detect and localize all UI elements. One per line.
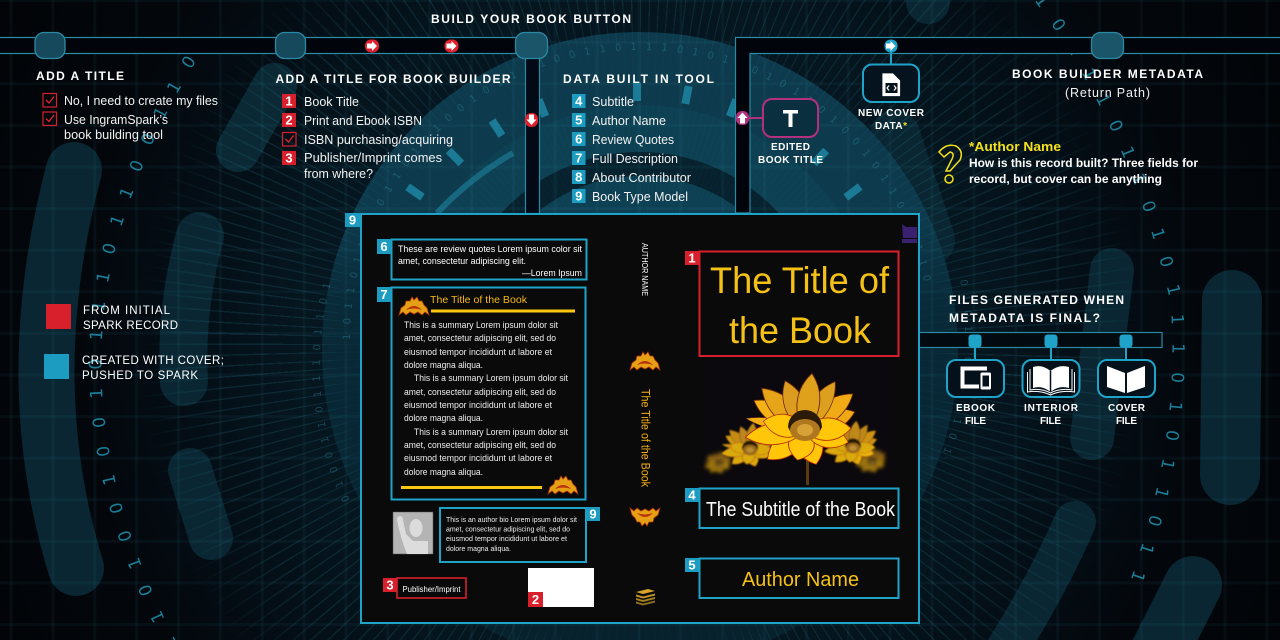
badge 1: 1 (285, 94, 293, 108)
badge 3 (282, 150, 296, 166)
item: Full Description (592, 152, 678, 166)
icon: interior file (1022, 360, 1080, 397)
spine: flower ornament 2 (630, 508, 660, 526)
badge 5 (572, 112, 586, 128)
panel: add a title for book builder (276, 72, 511, 181)
back cover: review quotes: These are review quotes Lorem ipsum color sit (398, 244, 582, 255)
badge 9 (572, 188, 586, 204)
back cover: full description: dolore magna aliqua. (404, 413, 483, 423)
spine: title: The Title of the Book (638, 389, 650, 487)
label: cover file (1108, 403, 1146, 427)
panel: data built in tool (563, 72, 714, 204)
badge 9 corner: 9 (349, 212, 356, 228)
back cover: full description: This is a summary Lorem ipsum dolor sit (414, 373, 568, 383)
item: Book Title (304, 95, 359, 109)
heading: build your book button: BUILD YOUR BOOK BUTTON (431, 12, 631, 26)
background: dial shapes and binary rings: 1011101101011101011011 (1035, 0, 1185, 580)
background: dial shapes and binary rings: 1101001001011101100110 (88, 56, 194, 640)
icon: question mark (939, 145, 961, 183)
label: interior file (1024, 403, 1079, 427)
background: dial shapes and binary rings: 10110110101101010010110100110111010110101101001011010110 (342, 42, 931, 339)
back cover: full description: dolore magna aliqua. (404, 360, 483, 370)
label: cover file: COVER (1108, 403, 1146, 414)
front cover: title: the Book (729, 310, 871, 351)
cover frame (361, 214, 919, 623)
button node 2 (276, 32, 306, 58)
back cover: author bio: 9 (589, 506, 597, 522)
dial disc (322, 32, 958, 640)
panel: files generated (918, 293, 1162, 427)
label: interior file: FILE (1040, 416, 1061, 427)
legend: created with cover (44, 354, 224, 382)
button node 3 (516, 32, 548, 58)
legend: from initial spark record (46, 304, 178, 332)
back cover: author bio: This is an author bio Lorem ipsum dolor sit (446, 515, 578, 524)
front cover: subtitle (685, 488, 898, 528)
front cover: subtitle: The Subtitle of the Book (706, 499, 896, 521)
connectors (968, 334, 1132, 360)
badge 7 (572, 150, 586, 166)
front cover: title (685, 250, 898, 356)
item text: No, I need to create my files (64, 94, 218, 108)
badge 5: 5 (575, 112, 582, 128)
back cover: full description: eiusmod tempor incididunt ut labore et (404, 453, 552, 463)
arrow: down (525, 113, 538, 127)
back cover: author bio (440, 506, 600, 562)
callout: author name (969, 140, 1199, 186)
heading: ADD A TITLE (36, 69, 124, 83)
back cover: barcode box (528, 568, 594, 607)
heading: book builder metadata: BOOK BUILDER METADATA (1012, 67, 1203, 81)
back cover: review quotes (377, 239, 586, 280)
badge 9: 9 (575, 188, 582, 204)
label: new cover data: NEW COVER (858, 108, 925, 119)
spine: flower ornament (630, 352, 660, 370)
callout: author name: *Author Name (969, 140, 1061, 154)
badge 7: 7 (575, 150, 582, 166)
item: Review Quotes (592, 133, 674, 147)
label: edited book title: BOOK TITLE (758, 155, 823, 166)
badge 3: 3 (285, 150, 293, 166)
label: interior file: INTERIOR (1024, 403, 1079, 414)
legend: from initial spark record: SPARK RECORD (83, 320, 178, 332)
arrow: right 2 (444, 40, 458, 52)
arrow: up magenta (736, 111, 749, 125)
button node 4 (1092, 32, 1124, 58)
checkbox 1 (43, 94, 56, 107)
front cover: flower image (702, 360, 893, 485)
label: new cover data (858, 108, 925, 132)
back cover: publisher imprint (383, 578, 466, 598)
callout: author name: record, but cover can be anything (969, 174, 1162, 186)
back cover: full description: eiusmod tempor incididunt ut labore et (404, 400, 552, 410)
arrow: right 1 (365, 40, 379, 52)
back cover: full description: The Title of the Book (430, 294, 528, 306)
top band: build flow (0, 38, 540, 54)
button node 1 (35, 32, 65, 58)
front cover: title: 1 (688, 250, 696, 266)
item continued: from where? (304, 167, 373, 181)
background: radial spokes (166, 0, 1108, 640)
legend: created with cover: PUSHED TO SPARK (82, 370, 198, 382)
back cover: full description (377, 287, 586, 500)
back cover: author bio: eiusmod tempor incididunt ut labore et (446, 534, 568, 543)
item text continued: book building tool (64, 128, 163, 142)
badge 8 (572, 170, 586, 184)
badge 6: 6 (575, 132, 582, 146)
badge 4 (572, 94, 586, 108)
label: ebook file: FILE (965, 416, 986, 427)
legend: created with cover: CREATED WITH COVER; (82, 355, 224, 367)
back cover: full description: This is a summary Lorem ipsum dolor sit (404, 320, 558, 330)
back cover: publisher imprint: Publisher/Imprint (402, 585, 461, 594)
item: Publisher/Imprint comes (304, 151, 442, 165)
item: Book Type Model (592, 190, 688, 204)
icon: new cover data (863, 52, 919, 102)
back cover: author photo (393, 512, 433, 554)
item: Subtitle (592, 95, 634, 109)
spine: author name: AUTHOR NAME (640, 243, 649, 296)
badge 6 (572, 132, 586, 146)
back cover: full description: amet, consectetur adipiscing elit, sed do (404, 333, 556, 343)
heading: ADD A TITLE FOR BOOK BUILDER (276, 72, 511, 86)
icon: cover file (1098, 360, 1155, 397)
legend: from initial spark record: FROM INITIAL (83, 305, 171, 317)
icon: edited book title (749, 99, 818, 137)
icon: ebook file (947, 360, 1004, 397)
badge 2: 2 (285, 112, 293, 128)
back cover: review quotes: 6 (380, 239, 388, 254)
back cover: full description: eiusmod tempor incididunt ut labore et (404, 347, 552, 357)
heading: book builder metadata: (Return Path) (1065, 86, 1150, 100)
checkbox 2 (43, 112, 56, 126)
badge 1 (282, 94, 296, 108)
band (918, 332, 1162, 348)
background: dial shapes and binary rings: 010110101101 (944, 280, 972, 453)
callout: author name: How is this record built? Three fields for (969, 158, 1199, 170)
front cover: author name: Author Name (742, 569, 859, 591)
label: edited book title (758, 142, 823, 166)
arrow: right blue (884, 40, 898, 52)
back cover: barcode box: 2 (532, 592, 539, 607)
badge 9 corner (345, 212, 360, 228)
front cover: subtitle: 4 (688, 488, 696, 502)
back cover: author bio: amet, consectetur adipiscing elit, sed do (446, 524, 570, 534)
back cover: review quotes: —Lorem Ipsum (522, 268, 582, 279)
item: Author Name (592, 114, 666, 128)
top band: return path (736, 38, 1280, 213)
item text: Use IngramSpark’s (64, 113, 168, 127)
badge 4: 4 (575, 94, 583, 108)
heading: book builder metadata (1012, 67, 1203, 100)
checkbox (282, 132, 296, 146)
back cover: full description: dolore magna aliqua. (404, 467, 483, 477)
back cover: full description: amet, consectetur adipiscing elit, sed do (404, 440, 556, 450)
label: edited book title: EDITED (771, 142, 810, 153)
heading: DATA BUILT IN TOOL (563, 72, 714, 86)
item: ISBN purchasing/acquiring (304, 133, 453, 147)
label: ebook file (956, 403, 996, 427)
back cover: publisher imprint: 3 (386, 578, 394, 592)
back cover: author bio: dolore magna aliqua. (446, 544, 511, 553)
front cover: author name (685, 558, 898, 598)
front cover: author name: 5 (688, 558, 696, 572)
label: cover file: FILE (1116, 416, 1137, 427)
panel: book cover (345, 212, 919, 623)
back cover: full description: This is a summary Lorem ipsum dolor sit (414, 427, 568, 437)
heading: FILES GENERATED WHEN (949, 293, 1124, 307)
heading line 2: METADATA IS FINAL? (949, 311, 1100, 325)
label: ebook file: EBOOK (956, 403, 996, 414)
badge 2 (282, 112, 296, 128)
back cover: review quotes: amet, consectetur adipiscing elit. (398, 256, 526, 267)
panel: add a title (36, 69, 218, 142)
vertical band: down to book (526, 54, 540, 214)
item: Print and Ebook ISBN (304, 114, 422, 128)
front cover: purple logo (902, 224, 917, 243)
back cover: full description: 7 (380, 287, 388, 302)
label: new cover data: DATA* (875, 121, 907, 132)
front cover: title: The Title of (710, 260, 890, 301)
spine: publisher logo (636, 589, 655, 606)
badge 8: 8 (575, 170, 582, 184)
item: About Contributor (592, 171, 691, 185)
back cover: full description: amet, consectetur adipiscing elit, sed do (404, 387, 556, 397)
